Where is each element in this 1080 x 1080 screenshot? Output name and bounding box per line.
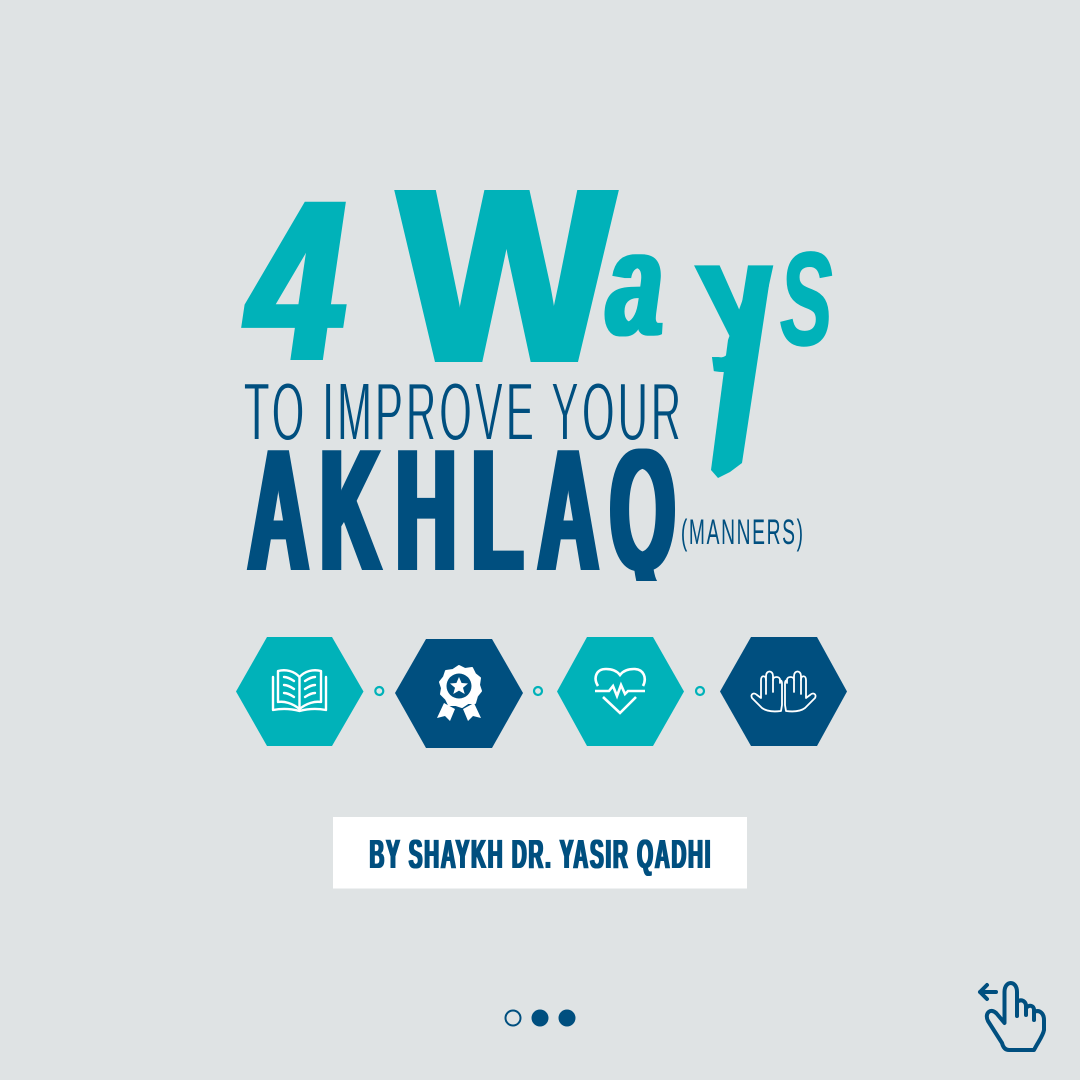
subtitle: to improve your: TO IMPROVE YOUR [244,365,681,458]
word: Ways: s [779,187,836,383]
icon: swipe hand with arrow [980,983,1044,1050]
author box: BY SHAYKH DR. YASIR QADHI [370,831,710,877]
hexagon icon: open book [236,637,364,746]
connector ring [696,687,704,695]
title: 4 Ways [246,136,836,478]
word: Ways [398,136,836,478]
note: manners: (MANNERS) [681,512,803,551]
connector ring [375,687,383,695]
word: Ways: W [398,136,615,415]
hexagon icon: heart with pulse [557,637,684,746]
word: Ways: y [689,211,785,373]
heading: Akhlaq: AKHLAQ [248,412,675,607]
connector ring [534,687,542,695]
word: Ways: a [607,201,663,368]
hexagon icon: award rosette [395,639,523,748]
hexagon icon: raised hands [720,637,847,746]
pagination dots [506,1010,576,1026]
icon row [236,637,847,748]
numeral 4: 4 [246,153,345,410]
author box [333,817,747,888]
